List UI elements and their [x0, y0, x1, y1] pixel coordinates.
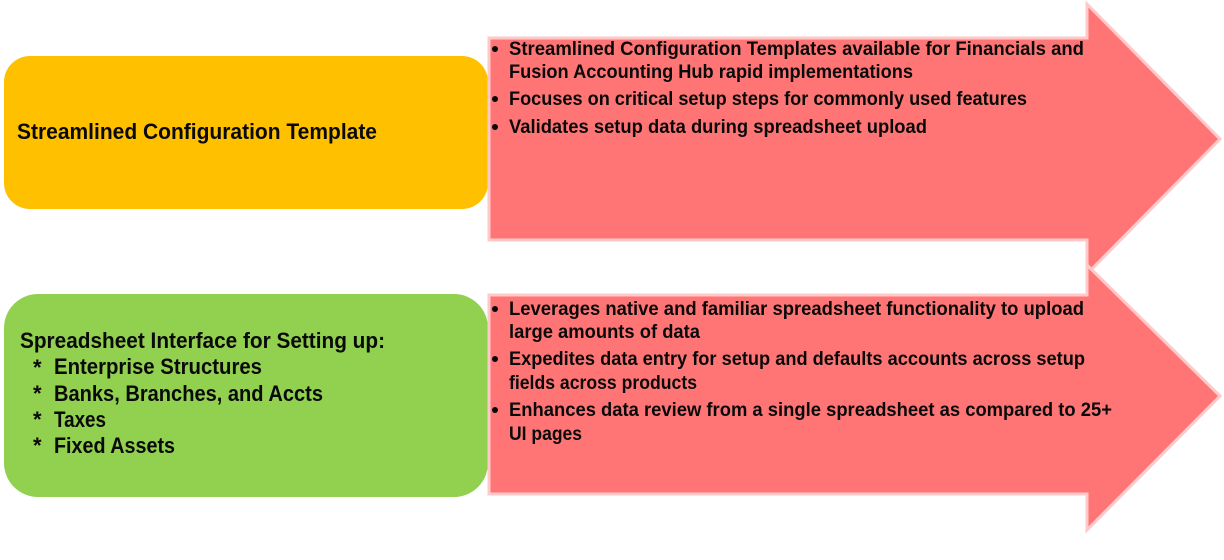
text block: spreadsheet interface list: * — [33, 381, 42, 406]
text block: bottom arrow bullets: large amounts of data — [509, 322, 700, 343]
text block: bottom arrow bullets: Enhances data review from a single spreadsheet as compared to 25+ — [509, 400, 1112, 421]
text block: top arrow bullets: Validates setup data during spreadsheet upload — [509, 117, 927, 138]
text block: bottom arrow bullets: UI pages — [509, 424, 582, 445]
text block: bottom arrow bullets: Expedites data entry for setup and defaults accounts across setup — [509, 349, 1085, 370]
text block: spreadsheet interface list: Banks, Branches, and Accts — [54, 381, 323, 406]
text block: top arrow bullets — [492, 39, 1084, 138]
text block: spreadsheet interface list: Spreadsheet Interface for Setting up: — [20, 328, 385, 353]
text block: spreadsheet interface list — [20, 328, 385, 458]
heading: streamlined configuration template: Streamlined Configuration Template — [17, 119, 377, 144]
arrow: top feature arrow — [489, 4, 1220, 274]
panel: streamlined configuration template box — [4, 56, 488, 209]
text block: top arrow bullets: Focuses on critical setup steps for commonly used features — [509, 89, 1027, 110]
text block: spreadsheet interface list: * — [33, 433, 42, 458]
text block: spreadsheet interface list: * — [33, 407, 42, 432]
text block: top arrow bullets: Streamlined Configuration Templates available for Financials and — [509, 39, 1084, 60]
text block: spreadsheet interface list: Taxes — [54, 407, 106, 432]
text block: spreadsheet interface list: Enterprise Structures — [54, 354, 262, 379]
arrow: bottom feature arrow — [489, 265, 1220, 530]
text block: spreadsheet interface list: Fixed Assets — [54, 433, 175, 458]
text block: bottom arrow bullets: Leverages native and familiar spreadsheet functionality to upload — [509, 299, 1084, 320]
text block: spreadsheet interface list: * — [33, 355, 42, 380]
text block: bottom arrow bullets — [492, 299, 1112, 445]
text block: bottom arrow bullets: fields across products — [509, 373, 697, 394]
text block: top arrow bullets: Fusion Accounting Hub rapid implementations — [509, 62, 913, 83]
panel: spreadsheet interface box — [4, 294, 488, 497]
